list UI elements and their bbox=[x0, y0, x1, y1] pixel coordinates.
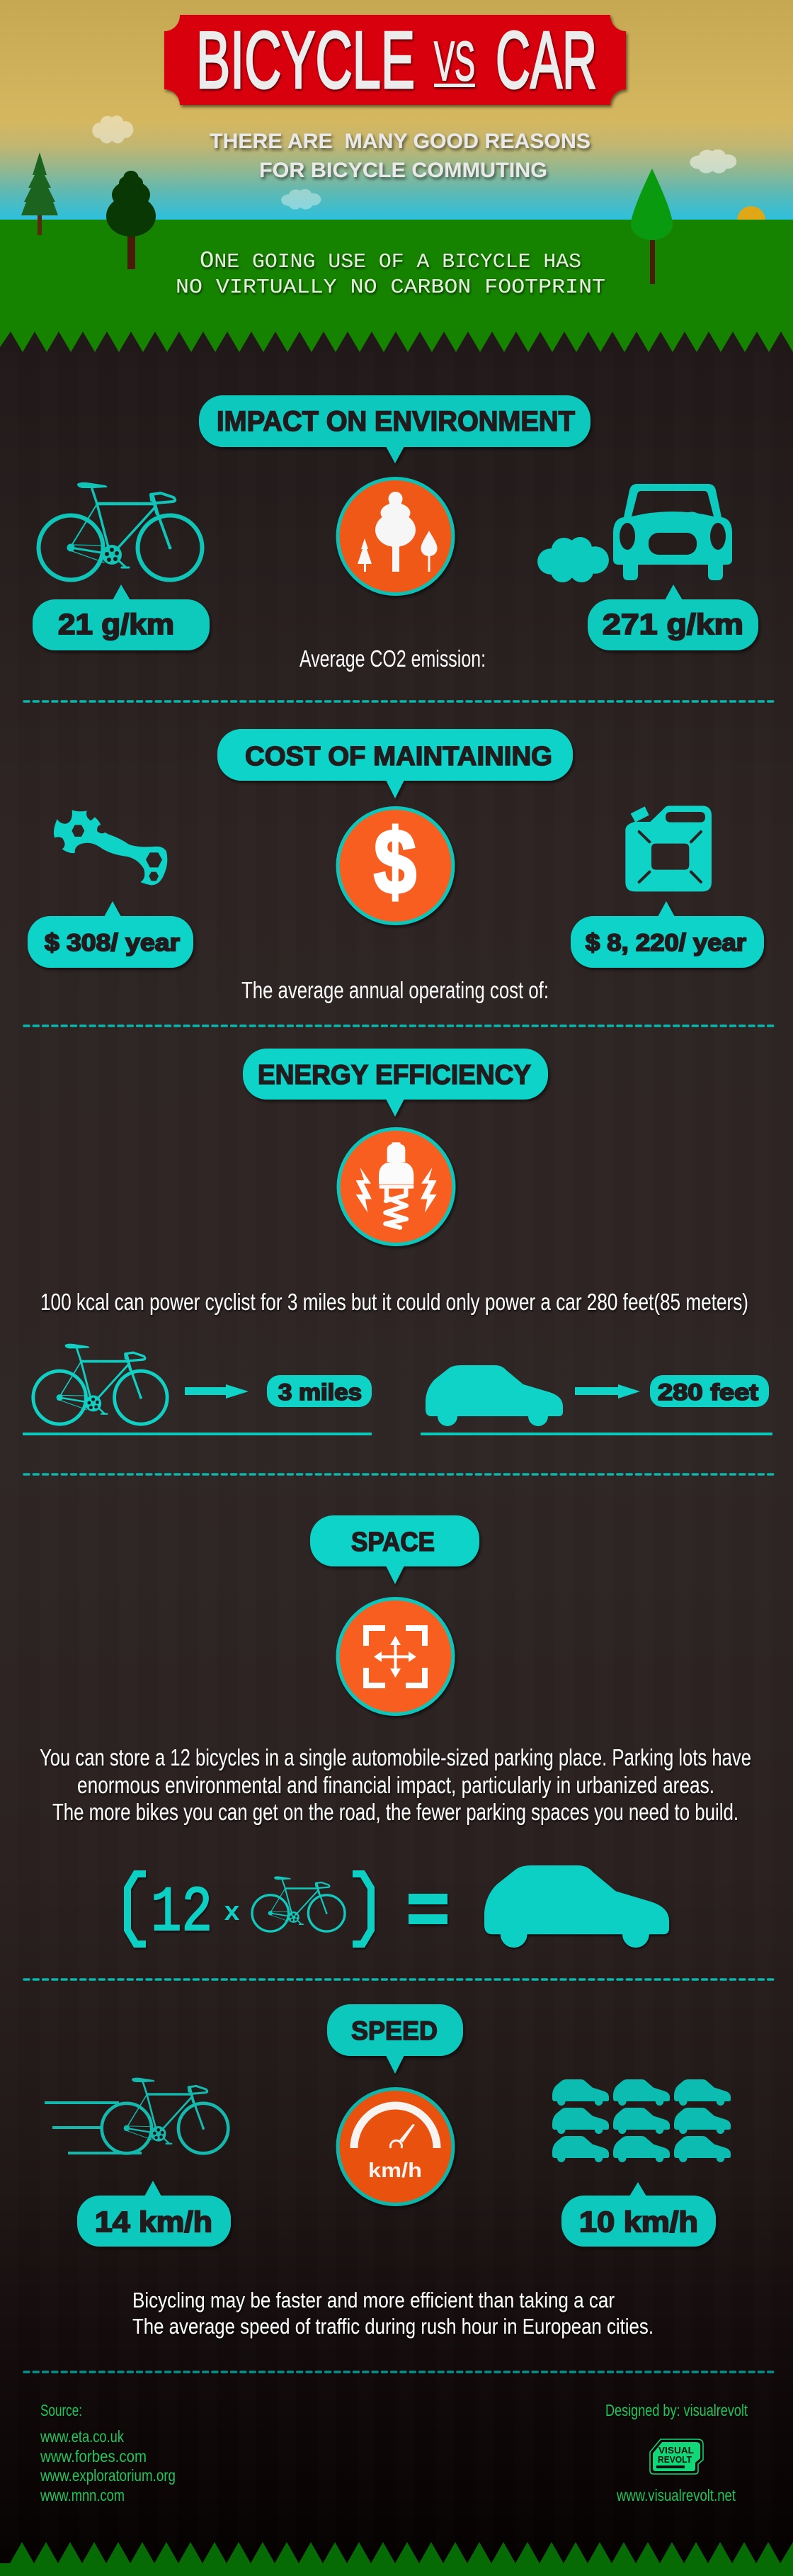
description: The average speed of traffic during rush hour in European cities. bbox=[132, 2314, 654, 2339]
cloud right bbox=[690, 149, 736, 173]
equation: 12 bicycles equal one car bbox=[127, 1865, 669, 1950]
footer: sources: www.exploratorium.org bbox=[40, 2466, 176, 2485]
arrow: car distance bbox=[575, 1384, 640, 1399]
icon: fuel can bbox=[625, 806, 712, 891]
title banner bbox=[164, 15, 626, 106]
value bubble: 10 km/h bbox=[561, 2182, 716, 2247]
description: Bicycling may be faster and more efficient than taking a car bbox=[132, 2288, 615, 2312]
heading text: COST OF MAINTAINING bbox=[245, 742, 552, 772]
footer: sources: www.forbes.com bbox=[40, 2447, 147, 2465]
equation: 12 bicycles equal one car: x bbox=[224, 1898, 240, 1928]
icon: bicycle bbox=[38, 482, 202, 580]
value bubble: bicycle cost: $ 308/ year bbox=[45, 930, 180, 956]
icon: bicycle bbox=[33, 1344, 167, 1424]
arrow: bicycle distance bbox=[185, 1384, 249, 1399]
icon: visual revolt logo bbox=[650, 2439, 703, 2474]
divider bbox=[24, 1473, 773, 1476]
ground line left bbox=[23, 1433, 372, 1435]
icon: traffic jam bbox=[552, 2079, 731, 2162]
divider bbox=[24, 1978, 773, 1981]
icon: tall tree bbox=[631, 169, 673, 284]
subtitle: THERE ARE MANY GOOD REASONS bbox=[210, 130, 591, 153]
title text: vs bbox=[434, 30, 475, 92]
cloud middle bbox=[281, 189, 321, 210]
divider bbox=[24, 700, 773, 703]
value bubble: car 271 g/km: 271 g/km bbox=[603, 608, 743, 640]
grass field bbox=[0, 220, 793, 354]
icon: visual revolt logo: REVOLT bbox=[658, 2454, 692, 2465]
heading bubble bbox=[199, 395, 591, 463]
footer: designer credit: www.visualrevolt.net bbox=[616, 2486, 736, 2504]
icon: visual revolt logo: VISUAL bbox=[658, 2445, 694, 2456]
icon: dollar badge bbox=[336, 806, 455, 925]
divider bbox=[24, 1024, 773, 1027]
intro statement: ONE GOING USE OF A BICYCLE HAS bbox=[200, 248, 581, 274]
zigzag grass edge top bbox=[0, 332, 793, 352]
icon: sun bbox=[737, 206, 765, 220]
panel: impact on environment bbox=[33, 395, 758, 672]
icon: bulb badge bbox=[337, 1127, 456, 1246]
panel: cost of maintaining bbox=[28, 729, 764, 1003]
icon: front car with exhaust bbox=[537, 484, 732, 582]
value bubble: 14 km/h: 14 km/h bbox=[95, 2205, 212, 2238]
value bubble: car 271 g/km bbox=[588, 584, 758, 650]
subtitle: FOR BICYCLE COMMUTING bbox=[259, 159, 547, 182]
intro statement bbox=[176, 248, 605, 299]
panel: energy efficiency bbox=[23, 1049, 772, 1435]
title text: car: CAR bbox=[496, 16, 597, 106]
heading bubble bbox=[243, 1049, 548, 1117]
divider bbox=[24, 2371, 773, 2373]
footer: designer credit bbox=[605, 2401, 748, 2504]
panel: space bbox=[40, 1515, 751, 1950]
heading text: SPEED bbox=[351, 2016, 438, 2045]
caption: Average CO2 emission: bbox=[299, 645, 486, 672]
footer: sources: www.eta.co.uk bbox=[40, 2427, 124, 2446]
value bubble: bicycle cost bbox=[28, 901, 193, 968]
value bubble: 10 km/h: 10 km/h bbox=[579, 2205, 698, 2238]
title text: bicycle: BICYCLE bbox=[196, 16, 415, 106]
heading bubble bbox=[327, 2004, 463, 2074]
icon: space badge bbox=[336, 1597, 455, 1716]
value bubble: bicycle 21 g/km: 21 g/km bbox=[58, 608, 174, 640]
footer: sources: Source: bbox=[40, 2401, 82, 2419]
heading text: ENERGY EFFICIENCY bbox=[258, 1060, 531, 1090]
cloud left bbox=[92, 115, 133, 143]
intro statement: NO VIRTUALLY NO CARBON FOOTPRINT bbox=[176, 276, 605, 299]
icon: car side bbox=[426, 1365, 563, 1426]
heading text: IMPACT ON ENVIRONMENT bbox=[217, 406, 575, 437]
icon: speedometer badge: km/h bbox=[368, 2159, 422, 2182]
heading text: SPACE bbox=[351, 1527, 435, 1557]
subtitle bbox=[210, 130, 591, 182]
footer: designer credit: Designed by: visualrevolt bbox=[605, 2401, 748, 2419]
icon: speedometer badge bbox=[336, 2087, 455, 2206]
value bubble: car cost bbox=[571, 901, 764, 968]
icon: pine tree bbox=[21, 152, 58, 235]
heading bubble bbox=[310, 1515, 479, 1584]
value bubble: 280 feet bbox=[650, 1375, 769, 1407]
value bubble: car cost: $ 8, 220/ year bbox=[586, 930, 746, 956]
icon: moving bicycle bbox=[45, 2078, 228, 2153]
sky background bbox=[0, 0, 793, 220]
description bbox=[40, 1744, 751, 1825]
value bubble: bicycle 21 g/km bbox=[33, 584, 210, 650]
value bubble: 3 miles: 3 miles bbox=[278, 1379, 362, 1405]
heading bubble bbox=[217, 729, 573, 798]
icon: bike wrench bbox=[54, 810, 167, 885]
zigzag grass edge bottom bbox=[0, 2542, 793, 2576]
icon: trees badge bbox=[336, 477, 455, 596]
description bbox=[132, 2288, 654, 2339]
title text: vs: VS bbox=[434, 30, 475, 92]
value bubble: 14 km/h bbox=[77, 2181, 231, 2247]
footer: sources bbox=[40, 2401, 176, 2504]
value bubble: 3 miles bbox=[267, 1375, 372, 1407]
value bubble: 280 feet: 280 feet bbox=[658, 1379, 758, 1405]
footer: sources: www.mnn.com bbox=[40, 2486, 125, 2504]
caption: The average annual operating cost of: bbox=[241, 977, 549, 1003]
icon: round tree bbox=[106, 171, 156, 269]
ground line right bbox=[421, 1433, 772, 1435]
panel: speed bbox=[45, 2004, 731, 2339]
icon: dollar badge: $ bbox=[374, 810, 416, 913]
equation: 12 bicycles equal one car: 12 bbox=[151, 1877, 212, 1950]
